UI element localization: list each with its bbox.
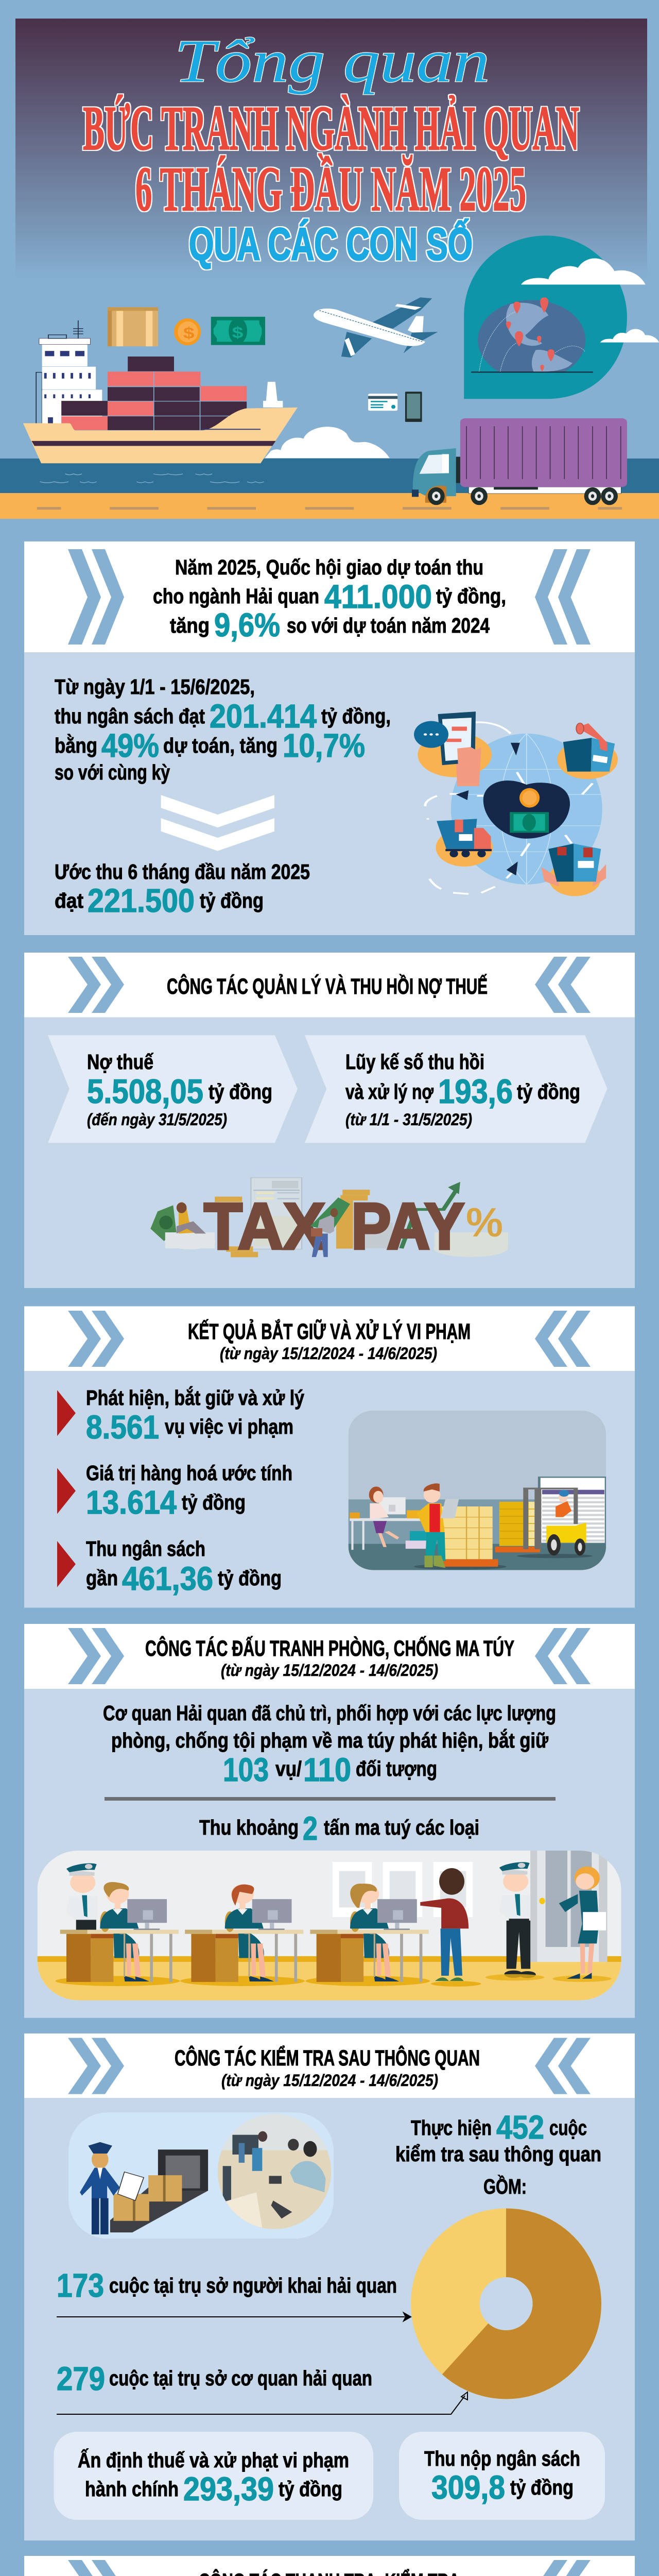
text: collected [55,675,391,784]
stat: budget [86,1537,282,1597]
heading: (từ ngày 15/12/2024 - 14/6/2025) [221,1661,438,1680]
text: collected: 201.414 [210,698,317,735]
text: collected: 49% [101,727,159,764]
text: inspections total: GỒM: [483,2175,527,2198]
illustration: truck [412,418,627,505]
illustration: tax pay: % [466,1199,503,1245]
text: budget target: cho ngành Hải quan [153,584,319,608]
text: budget target [153,555,506,643]
card: budget: 309,8 [431,2469,505,2506]
label: 173: 173 [57,2267,104,2304]
card: budget: Thu nộp ngân sách [424,2447,580,2470]
icon: chevrons [68,2038,591,2094]
icon: chevrons [68,1311,591,1367]
heading: KẾT QUẢ BẮT GIỮ VÀ XỬ LÝ VI PHẠM [188,1319,471,1344]
text: seized weight: Thu khoảng [199,1816,299,1839]
card: penalties [54,2432,373,2520]
text: budget target: tăng [170,614,210,637]
text: collected: so với cùng kỳ [55,760,170,784]
text: budget target: so với dự toán năm 2024 [287,614,490,637]
icon: coin: $ [183,324,195,342]
card: tax debt: (đến ngày 31/5/2025) [87,1110,227,1129]
text: cases: đối tượng [356,1757,437,1781]
text: collected: Từ ngày 1/1 - 15/6/2025, [55,675,255,699]
text: seized weight: 2 [303,1810,318,1847]
icon: down chevrons [161,795,274,851]
heading: CÔNG TÁC ĐẤU TRANH PHÒNG, CHỐNG MA TÚY [145,1636,514,1661]
chart: donut [411,2208,601,2399]
heading [175,2045,480,2090]
card: tax debt: 5.508,05 [87,1072,203,1110]
arrow: 279 [57,2392,467,2414]
text: collected: dự toán, tăng [163,734,278,757]
label: 279: cuộc tại trụ sở cơ quan hải quan [109,2366,372,2390]
text: collected: tỷ đồng, [321,704,391,728]
stat: budget: Thu ngân sách [86,1537,205,1561]
stat: budget: 461,36 [122,1560,213,1597]
stat: goods value: Giá trị hàng hoá ước tính [86,1461,292,1485]
text: collected: 10,7% [283,727,365,764]
text: collected: bằng [55,734,97,757]
stat: goods value [86,1461,292,1521]
card: recovered debt [305,1035,608,1143]
panel: header [0,19,659,519]
icon: parcel [108,307,158,346]
icon: phone [405,392,422,422]
text: cases [103,1701,556,1788]
icon: chevrons [68,2560,591,2576]
icon: banknote: $ [232,324,244,342]
text: budget target: 411.000 [324,578,432,615]
label: 173: cuộc tại trụ sở người khai hải quan [109,2274,397,2297]
text: estimate: 221.500 [88,882,195,919]
heading: CÔNG TÁC QUẢN LÝ VÀ THU HỒI NỢ THUẾ [167,974,488,999]
text: inspections total: 452 [496,2109,544,2146]
text: inspections total: Thực hiện [411,2116,492,2140]
panel: tax debt [24,953,635,1288]
card: penalties: hành chính [85,2477,179,2501]
heading: (từ ngày 15/12/2024 - 14/6/2025) [220,1344,437,1363]
heading: CÔNG TÁC KIỂM TRA SAU THÔNG QUAN [175,2045,480,2071]
stat: budget: tỷ đồng [218,1566,282,1590]
text: estimate: tỷ đồng [200,889,264,912]
icon: card [368,394,397,411]
illustration: customs office [38,1851,621,2001]
icon: coin [174,318,201,345]
card: tax debt: Nợ thuế [87,1050,153,1074]
stat: goods value: tỷ đồng [182,1490,246,1514]
text: cases: 110 [303,1751,351,1788]
card: tax debt [48,1035,298,1143]
card: budget [399,2432,605,2520]
text: seized weight: tấn ma tuý các loại [324,1816,479,1839]
stat: violations [86,1386,304,1446]
stat: budget: gần [86,1566,118,1590]
text: estimate: đạt [55,889,83,912]
text: estimate: Ước thu 6 tháng đầu năm 2025 [55,860,310,884]
illustration: tax pay: TAX [204,1190,325,1263]
card: penalties: Ấn định thuế và xử phạt vi phạm [78,2448,349,2472]
road [0,493,659,519]
illustration: inspector and photo [68,2112,334,2239]
sea [0,459,659,493]
title: script: Tổng quan [175,27,490,95]
stat: goods value: 13.614 [86,1484,177,1521]
heading [188,1319,471,1363]
text: budget target: 9,6% [214,606,280,643]
card: recovered debt: Lũy kế số thu hồi [345,1050,484,1074]
icon: chevrons [68,957,591,1013]
card: recovered debt: tỷ đồng [517,1080,580,1104]
illustration: trade globe [414,711,618,896]
label: 279: 279 [57,2360,105,2397]
illustration: warehouse [349,1411,606,1570]
icon: red markers [57,1390,76,1587]
text: budget target: Năm 2025, Quốc hội giao dự toán thu [175,555,483,579]
card: recovered debt: (từ 1/1 - 31/5/2025) [345,1110,472,1129]
panel: inspection [24,2556,635,2576]
text: cases: phòng, chống tội phạm về ma túy phát hiện, bắt giữ [111,1728,548,1752]
card: recovered debt: và xử lý nợ [345,1080,434,1104]
heading [145,1636,514,1680]
card: tax debt: tỷ đồng [209,1080,272,1104]
icon: airplane [314,297,438,358]
text: inspections total [395,2109,601,2198]
text: seized weight [199,1810,479,1847]
text: inspections total: cuộc [549,2116,587,2140]
text: cases: 103 [223,1751,269,1788]
title: line 3: QUA CÁC CON SỐ [189,218,473,269]
text: inspections total: kiểm tra sau thông quan [395,2142,601,2166]
stat: violations: vụ việc vi phạm [165,1415,293,1438]
card: budget: tỷ đồng [510,2476,574,2499]
text: collected: thu ngân sách đạt [55,704,205,728]
text: estimate [55,860,310,919]
label: 279 [57,2360,372,2397]
card: penalties: 293,39 [183,2470,274,2507]
text: cases: vụ/ [275,1757,302,1781]
text: budget target: tỷ đồng, [436,584,506,608]
panel: anti-drug [24,1624,635,2018]
icon: chevrons [68,549,591,645]
card: penalties: tỷ đồng [279,2477,342,2501]
heading: (từ ngày 15/12/2024 - 14/6/2025) [221,2071,438,2090]
label: 173 [57,2267,397,2304]
icon: banknote [211,317,265,345]
illustration: header scene [23,235,659,509]
icon: chevrons [68,1628,591,1684]
illustration: container ship [23,320,298,463]
illustration: tax pay: PAY [351,1190,464,1263]
card: recovered debt: 193,6 [438,1072,513,1110]
illustration: tax pay [150,1178,508,1263]
panel: post-clearance [24,2033,635,2540]
text: cases: Cơ quan Hải quan đã chủ trì, phối hợp với các lực lượng [103,1701,556,1725]
panel: seizure results [24,1307,635,1607]
stat: violations: Phát hiện, bắt giữ và xử lý [86,1386,304,1410]
arrow: 173 [57,2313,411,2321]
panel: budget [24,541,635,935]
stat: violations: 8.561 [86,1409,159,1446]
